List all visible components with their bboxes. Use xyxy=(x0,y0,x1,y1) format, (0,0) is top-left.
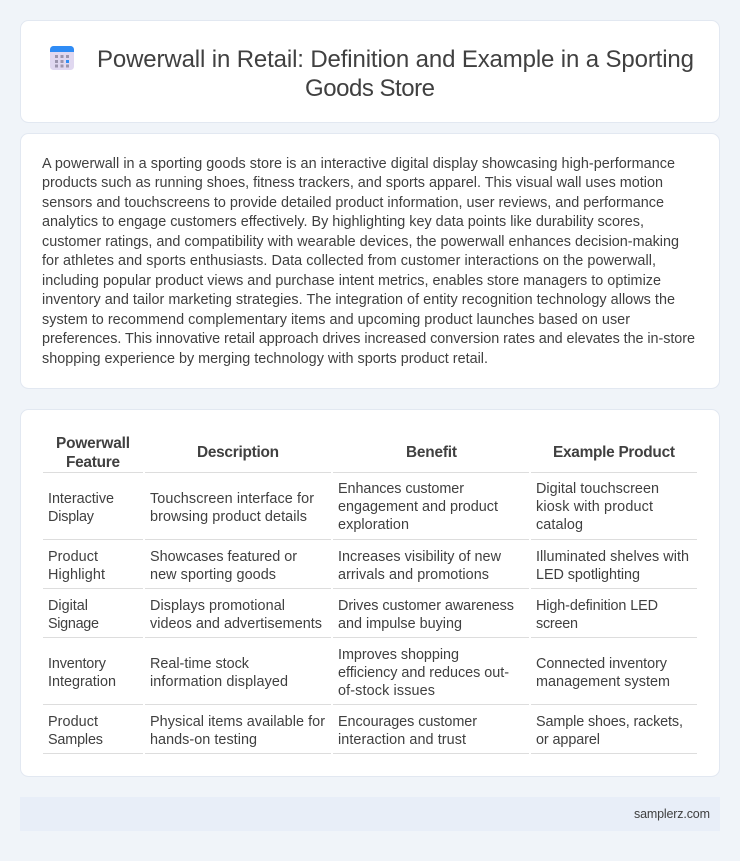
header: Benefit: Benefit xyxy=(406,444,457,461)
text block: definition: products such as running shoes, fitness trackers, and sports apparel. This visual wall uses motion xyxy=(42,175,663,191)
footer source text: samplerz.com xyxy=(634,807,710,821)
table row: Digital Signage: Signage xyxy=(48,616,99,632)
header: Description: Description xyxy=(197,444,279,461)
header: Example Product: Example Product xyxy=(553,444,675,461)
table row: Inventory Integration: Integration xyxy=(48,674,116,690)
table row: Product Highlight xyxy=(48,549,689,583)
table row: Product Highlight: LED spotlighting xyxy=(536,567,640,583)
table row: Product Highlight: Showcases featured or xyxy=(150,549,297,565)
panel: title card xyxy=(20,20,720,122)
footer bar xyxy=(20,797,720,831)
text block: definition: sensors and touchscreens to provide detailed product information, user reviews, and performance xyxy=(42,195,664,211)
table row: Product Highlight: Illuminated shelves with xyxy=(536,549,689,565)
table row: Interactive Display: exploration xyxy=(338,517,409,533)
table row: Digital Signage xyxy=(48,598,658,632)
table row: Interactive Display xyxy=(48,481,659,533)
text block: definition: customer ratings, and compatibility with wearable devices, the powerwall enhances decision-making xyxy=(42,234,679,250)
table row: Digital Signage: screen xyxy=(536,616,578,632)
table row: Product Samples: or apparel xyxy=(536,732,600,748)
table row: Inventory Integration xyxy=(48,647,670,699)
table row: Inventory Integration: management system xyxy=(536,674,670,690)
table row: Digital Signage: videos and advertisements xyxy=(150,616,322,632)
table row: Product Samples: Physical items available for xyxy=(150,714,325,730)
table row: Interactive Display: engagement and product xyxy=(338,499,498,515)
text block: definition: shopping experience by merging technology with sports product retail. xyxy=(42,351,488,367)
table header xyxy=(56,435,675,471)
table row: Product Samples xyxy=(48,714,683,748)
table row: Interactive Display: Display xyxy=(48,509,95,525)
table row: Digital Signage: Displays promotional xyxy=(150,598,285,614)
text block: definition: including popular product views and purchase intent metrics, enables store managers to optimize xyxy=(42,273,661,289)
table row: Interactive Display: Enhances customer xyxy=(338,481,464,497)
title: Powerwall in Retail: Definition and Example in a Sporting xyxy=(97,46,694,73)
text block: definition: inventory and tailor marketing strategies. The integration of entity recognition technology allows the xyxy=(42,292,675,308)
table row: Product Samples: Sample shoes, rackets, xyxy=(536,714,683,730)
table row: Product Highlight: Highlight xyxy=(48,567,105,583)
table row: Digital Signage: and impulse buying xyxy=(338,616,462,632)
table row: Inventory Integration: Connected inventory xyxy=(536,656,668,672)
table row: Product Highlight: arrivals and promotions xyxy=(338,567,489,583)
text block: definition: A powerwall in a sporting goods store is an interactive digital display showcasing high-performance xyxy=(42,156,675,172)
table row: Interactive Display: kiosk with product xyxy=(536,499,653,515)
table row: Inventory Integration: Inventory xyxy=(48,656,107,672)
table row: Inventory Integration: Improves shopping xyxy=(338,647,459,663)
table row: Product Samples: Samples xyxy=(48,732,103,748)
title xyxy=(97,46,694,102)
table row: Inventory Integration: information displayed xyxy=(150,674,288,690)
text block: definition: for athletes and sports enthusiasts. Data collected from customer interactions on the powerwall, xyxy=(42,253,656,269)
table row: Product Highlight: Product xyxy=(48,549,98,565)
table row: Digital Signage: High-definition LED xyxy=(536,598,658,614)
header: Powerwall Feature: Powerwall xyxy=(56,435,130,452)
table row: Product Samples: Product xyxy=(48,714,98,730)
panel: feature table xyxy=(20,410,720,776)
table row: Interactive Display: Digital touchscreen xyxy=(536,481,659,497)
panel: definition paragraph xyxy=(20,134,720,388)
table row: Digital Signage: Drives customer awareness xyxy=(338,598,514,614)
table row: Interactive Display: Interactive xyxy=(48,491,114,507)
table row: Interactive Display: catalog xyxy=(536,517,583,533)
text block: definition xyxy=(42,156,695,367)
table row: Product Highlight: new sporting goods xyxy=(150,567,276,583)
title: Goods Store xyxy=(305,75,435,102)
header: Powerwall Feature: Feature xyxy=(66,454,120,471)
header: Powerwall Feature xyxy=(56,435,130,471)
table row: Product Highlight: Increases visibility of new xyxy=(338,549,502,565)
table row: Inventory Integration: efficiency and reduces out- xyxy=(338,665,509,681)
table row: Digital Signage: Digital xyxy=(48,598,88,614)
text block: definition: preferences. This innovative retail approach drives increased conversion rates and elevates the in-store xyxy=(42,331,695,347)
table row: Product Samples: hands-on testing xyxy=(150,732,257,748)
table row: Interactive Display: browsing product details xyxy=(150,509,307,525)
text block: definition: analytics to engage customers effectively. By highlighting key data points like durability scores, xyxy=(42,214,644,230)
table row: Inventory Integration: Real-time stock xyxy=(150,656,250,672)
text block: definition: system to recommend complementary items and upcoming product launches based on user xyxy=(42,312,630,328)
icon: calendar grid xyxy=(50,46,74,70)
table row: Interactive Display: Touchscreen interface for xyxy=(150,491,314,507)
table row: Product Samples: Encourages customer xyxy=(338,714,477,730)
table row: Product Samples: interaction and trust xyxy=(338,732,466,748)
table row: Inventory Integration: of-stock issues xyxy=(338,683,435,699)
